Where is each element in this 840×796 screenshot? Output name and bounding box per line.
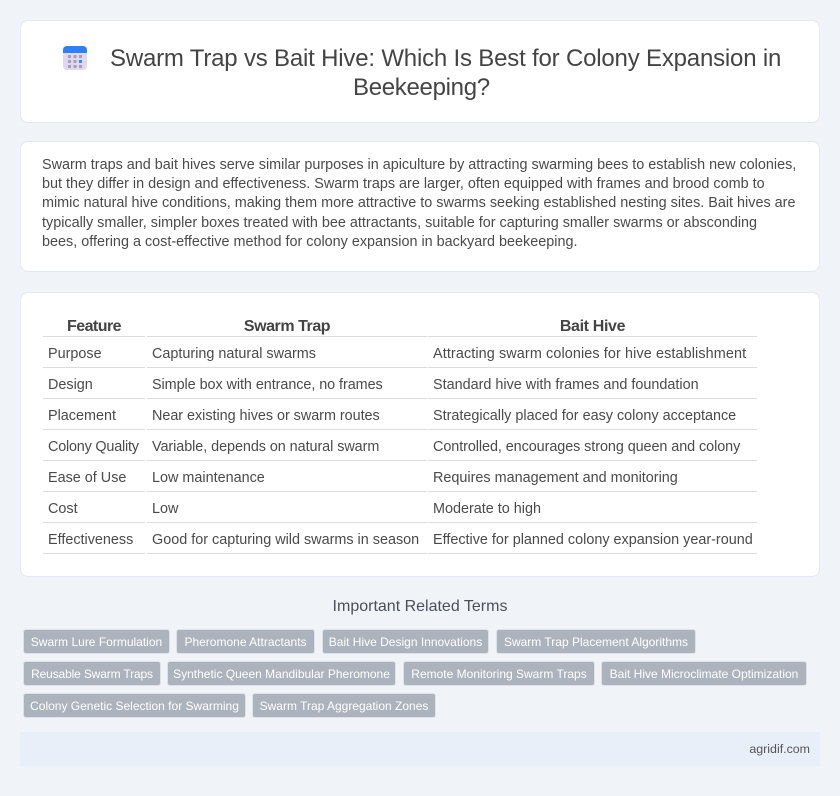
intro text block <box>42 156 796 250</box>
row: ease of use: Ease of Use <box>48 470 126 486</box>
table header: Feature <box>67 318 121 335</box>
row: effectiveness: Effectiveness <box>48 532 133 548</box>
row: ease of use <box>48 470 678 486</box>
footer bar <box>20 732 820 766</box>
related terms tags: Swarm Lure Formulation <box>31 635 162 649</box>
intro text block: bees, offering a cost-effective method for colony expansion in backyard beekeeping. <box>42 234 577 250</box>
row: design <box>48 377 699 393</box>
row: cost: Moderate to high <box>433 501 541 517</box>
row: ease of use: Low maintenance <box>152 470 265 486</box>
title <box>110 45 781 100</box>
row: placement: Near existing hives or swarm routes <box>152 408 380 424</box>
related terms tags: Reusable Swarm Traps <box>31 667 153 681</box>
row: effectiveness: Good for capturing wild swarms in season <box>152 532 419 548</box>
row: purpose: Purpose <box>48 346 102 362</box>
intro text block: but they differ in design and effectiveness. Swarm traps are larger, often equipped with frames and brood comb to <box>42 176 765 192</box>
related terms tags: Colony Genetic Selection for Swarming <box>30 699 239 713</box>
table header: Swarm Trap <box>244 318 330 335</box>
intro text block: mimic natural hive conditions, making them more attractive to swarms seeking established nesting sites. Bait hives are <box>42 195 795 211</box>
table header <box>67 318 625 335</box>
related terms tags: Bait Hive Design Innovations <box>329 635 482 649</box>
icon: calendar <box>63 46 87 70</box>
intro text block: Swarm traps and bait hives serve similar purposes in apiculture by attracting swarming bees to establish new colonies, <box>42 156 796 172</box>
related terms heading: Important Related Terms <box>333 598 507 615</box>
related terms tags <box>23 629 807 718</box>
header panel <box>20 20 820 123</box>
row: effectiveness: Effective for planned colony expansion year-round <box>433 532 753 548</box>
comparison table panel <box>20 292 820 577</box>
row: purpose: Capturing natural swarms <box>152 346 316 362</box>
row: colony quality: Variable, depends on natural swarm <box>152 439 379 455</box>
title: Beekeeping? <box>353 74 490 100</box>
row: colony quality <box>48 439 740 455</box>
table header: Bait Hive <box>560 318 625 335</box>
row: design: Simple box with entrance, no frames <box>152 377 383 393</box>
row: ease of use: Requires management and monitoring <box>433 470 678 486</box>
row: placement: Strategically placed for easy colony acceptance <box>433 408 736 424</box>
related terms tags: Synthetic Queen Mandibular Pheromone <box>173 667 390 681</box>
row: effectiveness <box>48 532 753 548</box>
row: design: Design <box>48 377 93 393</box>
related terms tags: Swarm Trap Aggregation Zones <box>260 699 428 713</box>
row: purpose <box>48 346 746 362</box>
row: cost: Cost <box>48 501 78 517</box>
related terms tags: Swarm Trap Placement Algorithms <box>504 635 688 649</box>
row: colony quality: Controlled, encourages strong queen and colony <box>433 439 740 455</box>
row: cost <box>48 501 541 517</box>
row: purpose: Attracting swarm colonies for hive establishment <box>433 346 746 362</box>
related terms tags: Bait Hive Microclimate Optimization <box>610 667 798 681</box>
related terms tags: Remote Monitoring Swarm Traps <box>411 667 587 681</box>
related terms tags: Pheromone Attractants <box>184 635 307 649</box>
row: placement <box>48 408 736 424</box>
intro text block: typically smaller, simpler boxes treated with bee attractants, suitable for capturing smaller swarms or absconding <box>42 215 757 231</box>
footer source: agridif.com <box>749 742 810 756</box>
row: placement: Placement <box>48 408 116 424</box>
title: Swarm Trap vs Bait Hive: Which Is Best for Colony Expansion in <box>110 45 781 72</box>
row: design: Standard hive with frames and foundation <box>433 377 699 393</box>
intro panel <box>20 141 820 272</box>
row: cost: Low <box>152 501 178 517</box>
row: colony quality: Colony Quality <box>48 439 139 455</box>
